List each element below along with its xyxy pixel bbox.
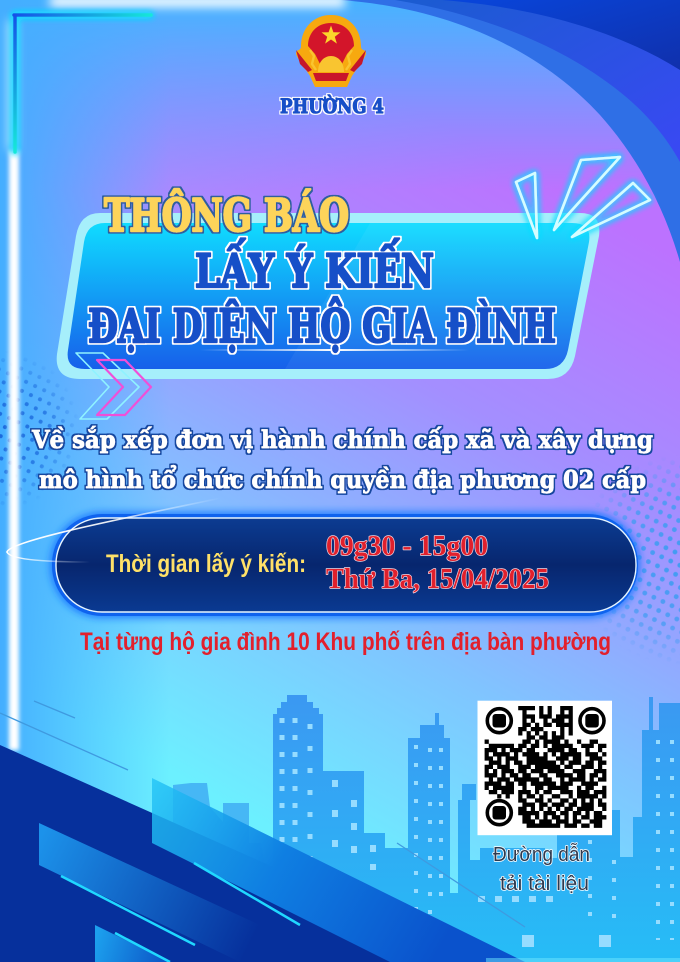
decorative underline glow [200,349,469,351]
text block: description [31,425,653,494]
city skyline [173,695,680,962]
icon: national emblem [296,15,366,87]
panel: title banner [57,213,599,379]
value: hours: 09g30 - 15g00 [326,530,488,562]
caption: document download link [493,843,590,895]
text block: description: mô hình tổ chức chính quyền địa phương 02 cấp [39,465,646,494]
label: time of consultation: Thời gian lấy ý kiến: [106,550,306,578]
bottom-left dark blue shapes [0,745,680,962]
caption: document download link: Đường dẫn [493,843,590,866]
left and top white glow [8,0,345,750]
halftone dots left and right [0,300,680,700]
value: date: Thứ Ba, 15/04/2025 [326,563,549,595]
decorative swoosh [7,498,221,562]
neon corner frame [14,15,151,152]
heading: Phường 4: PHƯỜNG 4 [280,93,384,118]
caption: document download link: tải tài liệu [500,873,589,895]
text block: description: Về sắp xếp đơn vị hành chính cấp xã và xây dựng [31,425,653,454]
heading: Lấy ý kiến: LẤY Ý KIẾN [195,237,434,298]
heading: Thông báo: THÔNG BÁO [104,189,349,242]
icon: neon chevrons [76,353,151,419]
icon: star [322,26,340,44]
top-right curved blue bands [340,0,680,262]
icon: neon triangles [516,157,650,238]
QR code [478,701,612,835]
thin diagonal lines [0,701,525,927]
panel: time pill [50,512,640,618]
